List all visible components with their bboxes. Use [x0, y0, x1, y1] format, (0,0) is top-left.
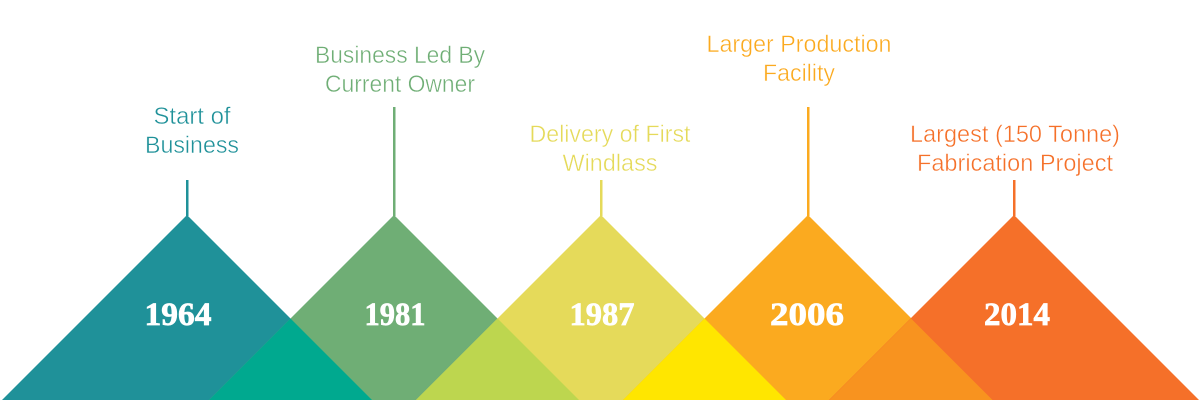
- milestone 2006: amber triangle: [623, 31, 993, 400]
- milestone 2014: orange triangle: [829, 121, 1199, 400]
- milestone 1987: yellow triangle: Delivery of First: [530, 121, 691, 148]
- milestone 1964: teal triangle: [2, 103, 372, 400]
- milestone 2006: amber triangle: 2006: [770, 297, 844, 333]
- overlap: yellow and amber: [623, 318, 786, 400]
- milestone 2006: amber triangle: Facility: [763, 60, 835, 87]
- milestone 2014: orange triangle: Largest (150 Tonne): [910, 121, 1120, 148]
- overlap: teal and green: [209, 318, 372, 400]
- milestone 1964: teal triangle: Start of: [154, 103, 231, 130]
- milestone 1987: yellow triangle: [416, 121, 786, 400]
- milestone 2014: orange triangle: 2014: [984, 297, 1050, 333]
- overlap: green and yellow: [416, 318, 579, 400]
- milestone 1987: yellow triangle: 1987: [570, 297, 634, 333]
- milestone 1981: green triangle: 1981: [364, 297, 426, 333]
- milestone 1987: yellow triangle: Windlass: [562, 150, 658, 177]
- milestone 1981: green triangle: Business Led By: [315, 42, 485, 69]
- milestone 2014: orange triangle: Fabrication Project: [917, 150, 1113, 177]
- milestone 1964: teal triangle: Business: [145, 132, 239, 159]
- milestone 2006: amber triangle: Larger Production: [706, 31, 892, 58]
- milestone 1981: green triangle: [209, 42, 579, 400]
- milestone 1964: teal triangle: 1964: [144, 297, 212, 333]
- milestone 1981: green triangle: Current Owner: [325, 71, 475, 98]
- overlap: amber and orange: [830, 318, 992, 400]
